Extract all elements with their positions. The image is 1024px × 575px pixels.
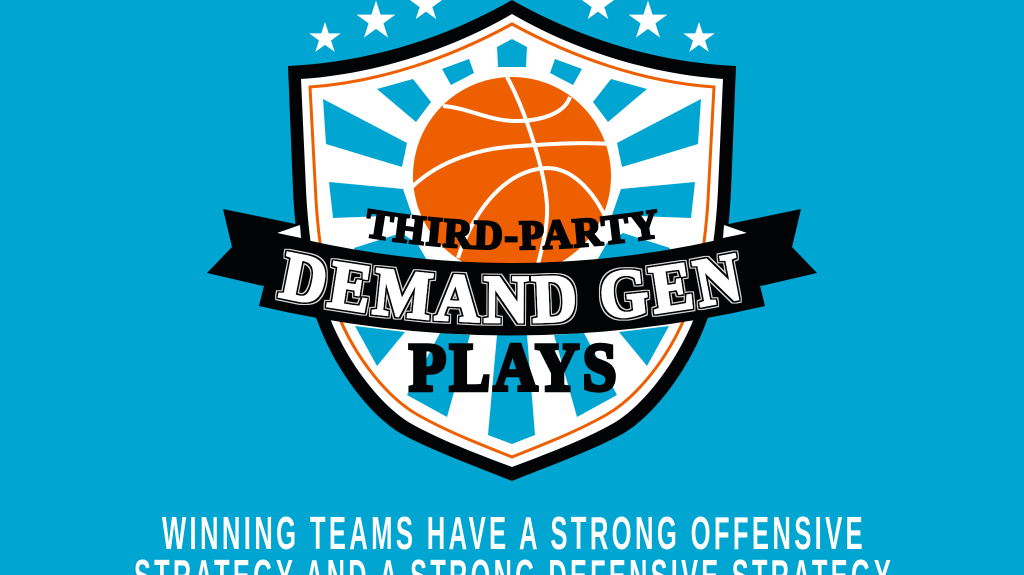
heading: plays: PLAYS: [409, 329, 620, 405]
shield badge: [288, 0, 736, 481]
heading: demand gen: DEMAND GEN: [275, 248, 742, 326]
stars: [309, 0, 715, 52]
ribbon banner: [207, 209, 817, 336]
basketball: [412, 77, 611, 275]
heading: third-party: THIRD-PARTY: [366, 208, 658, 250]
tagline: [134, 507, 894, 575]
sunburst rays: [323, 39, 701, 444]
